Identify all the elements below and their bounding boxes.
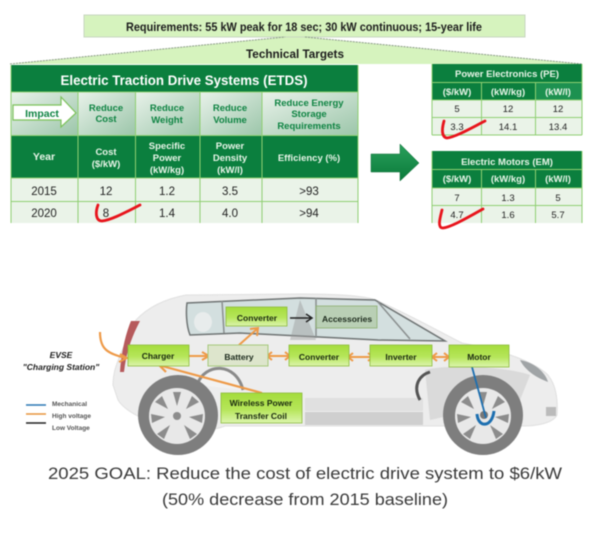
red check mark: ETDS cost bbox=[96, 205, 140, 221]
engine bay bbox=[425, 367, 530, 420]
goal caption bbox=[48, 465, 562, 509]
table: ETDS: Efficiency (%) bbox=[278, 153, 340, 164]
table: ETDS: 1.4 bbox=[159, 208, 176, 220]
table: ETDS: Storage bbox=[291, 109, 327, 120]
box: battery: Battery bbox=[224, 352, 254, 362]
table: ETDS: Density bbox=[213, 153, 248, 164]
box: inverter: Inverter bbox=[385, 352, 417, 362]
impact arrow bbox=[13, 97, 76, 127]
table: power electronics: Power Electronics (PE) bbox=[455, 69, 559, 80]
table: electric motors bbox=[432, 151, 582, 223]
table: power electronics: 13.4 bbox=[549, 122, 567, 133]
table: ETDS: 12 bbox=[100, 186, 112, 198]
EVSE label bbox=[23, 350, 100, 372]
goal caption: (50% decrease from 2015 baseline) bbox=[162, 491, 448, 509]
table: ETDS: 3.5 bbox=[222, 186, 238, 198]
box: motor bbox=[449, 345, 509, 367]
box: converter top: Converter bbox=[237, 313, 278, 323]
rear wheel arch bbox=[197, 368, 243, 390]
table: ETDS: ($/kW) bbox=[92, 159, 120, 170]
table: power electronics: 12 bbox=[503, 104, 513, 115]
box: wireless power transfer coil: Transfer Coil bbox=[235, 411, 287, 421]
legend: High voltage bbox=[52, 413, 91, 420]
box: accessories bbox=[316, 306, 377, 328]
legend: Mechanical bbox=[52, 401, 87, 408]
arrow: ETDS to subsystems bbox=[371, 144, 419, 181]
box: charger: Charger bbox=[142, 351, 175, 361]
table: ETDS: 8 bbox=[103, 208, 109, 220]
EVSE label: "Charging Station" bbox=[23, 362, 100, 372]
table: ETDS: Power bbox=[216, 141, 245, 152]
table: electric motors: 7 bbox=[454, 193, 460, 204]
headlight bbox=[520, 360, 548, 382]
table: ETDS: Specific bbox=[149, 141, 185, 152]
front wheel bbox=[443, 375, 523, 455]
table: power electronics: 3.3 bbox=[450, 122, 464, 133]
EVSE label: EVSE bbox=[50, 350, 73, 360]
impact arrow: Impact bbox=[25, 108, 59, 120]
table: ETDS: Reduce bbox=[150, 103, 184, 114]
table: power electronics: ($/kW) bbox=[443, 87, 471, 98]
box: wireless power transfer coil bbox=[221, 393, 302, 423]
table: ETDS: Requirements bbox=[277, 121, 341, 132]
table: power electronics: (kW/kg) bbox=[491, 87, 525, 98]
table: ETDS: Cost bbox=[95, 147, 117, 158]
tail light bbox=[120, 321, 140, 372]
red check mark: PE cost bbox=[442, 121, 485, 138]
sill bbox=[305, 398, 423, 411]
table: ETDS: 2015 bbox=[31, 186, 57, 198]
table: electric motors: ($/kW) bbox=[443, 174, 471, 185]
rear wheel bbox=[138, 375, 218, 455]
table: power electronics bbox=[432, 64, 582, 135]
table: ETDS: Reduce Energy bbox=[274, 98, 344, 109]
side windows bbox=[186, 298, 445, 341]
car body bbox=[113, 294, 557, 431]
table: power electronics: 5 bbox=[454, 104, 460, 115]
table: power electronics: (kW/l) bbox=[545, 87, 571, 98]
requirements banner: Requirements: 55 kW peak for 18 sec; 30 kW continuous; 15-year life bbox=[126, 22, 482, 34]
table: ETDS: Reduce bbox=[213, 103, 247, 114]
table: ETDS: (kW/kg) bbox=[150, 165, 184, 176]
table: ETDS: 2020 bbox=[31, 208, 57, 220]
red check mark: EM cost bbox=[439, 209, 483, 228]
box: converter top bbox=[226, 307, 287, 326]
table: electric motors: 1.6 bbox=[501, 210, 515, 221]
table: electric motors: 4.7 bbox=[450, 210, 464, 221]
heading: technical targets: Technical Targets bbox=[246, 47, 344, 61]
seat bbox=[194, 312, 212, 332]
table: ETDS: 4.0 bbox=[222, 208, 238, 220]
legend: Low Voltage bbox=[52, 425, 90, 432]
table: ETDS: (kW/l) bbox=[217, 165, 243, 176]
table: power electronics: 14.1 bbox=[499, 122, 517, 133]
box: wireless power transfer coil: Wireless Power bbox=[230, 398, 293, 408]
goal caption: 2025 GOAL: Reduce the cost of electric drive system to $6/kW bbox=[48, 465, 562, 483]
table: ETDS: Electric Traction Drive Systems (ETDS) bbox=[60, 72, 308, 88]
mechanical link: motor to wheel bbox=[472, 367, 494, 424]
table: ETDS: Reduce bbox=[89, 103, 123, 114]
low voltage arrow bbox=[290, 314, 312, 322]
front arch bbox=[417, 372, 430, 400]
requirements banner bbox=[10, 15, 582, 64]
car illustration bbox=[113, 294, 557, 455]
table: electric motors: (kW/l) bbox=[545, 174, 571, 185]
table: ETDS: >93 bbox=[299, 186, 319, 198]
table: electric motors: Electric Motors (EM) bbox=[461, 157, 553, 168]
box: motor: Motor bbox=[467, 352, 491, 362]
box: converter middle: Converter bbox=[299, 352, 340, 362]
table: ETDS: >94 bbox=[299, 208, 319, 220]
table: ETDS: 1.2 bbox=[159, 186, 175, 198]
table: ETDS bbox=[11, 65, 358, 223]
legend bbox=[26, 401, 91, 432]
table: electric motors: (kW/kg) bbox=[491, 174, 525, 185]
table: power electronics: 12 bbox=[553, 104, 563, 115]
table: electric motors: 5 bbox=[555, 193, 561, 204]
orange power flow arrows bbox=[100, 328, 449, 393]
table: ETDS: Cost bbox=[95, 114, 117, 125]
box: charger bbox=[128, 345, 189, 366]
table: ETDS: Year bbox=[33, 151, 55, 163]
box: accessories: Accessories bbox=[322, 314, 372, 324]
table: electric motors: 1.3 bbox=[501, 193, 515, 204]
table: ETDS: Volume bbox=[213, 115, 247, 126]
table: electric motors: 5.7 bbox=[551, 210, 565, 221]
box: battery bbox=[208, 345, 268, 366]
box: converter middle bbox=[289, 345, 349, 366]
table: ETDS: Weight bbox=[151, 115, 184, 126]
box: inverter bbox=[370, 345, 432, 366]
table: ETDS: Power bbox=[153, 153, 182, 164]
